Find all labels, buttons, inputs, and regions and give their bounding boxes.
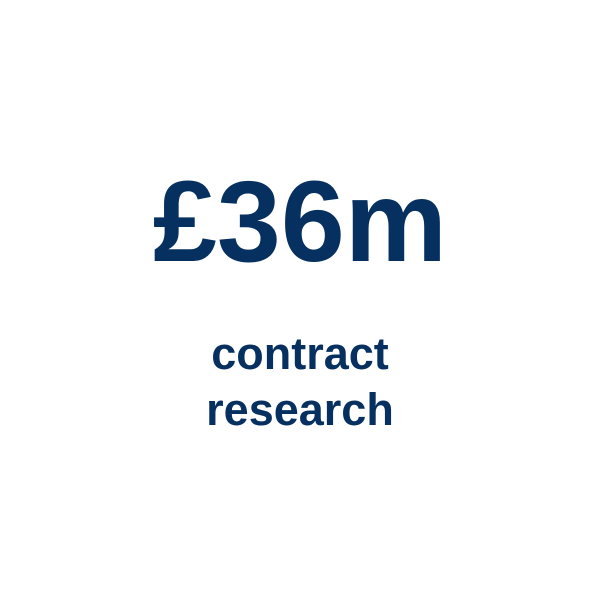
- caption text: [206, 328, 394, 435]
- headline figure: £36m: [153, 158, 447, 286]
- caption text: contract: [211, 328, 389, 379]
- caption text: research: [206, 384, 394, 435]
